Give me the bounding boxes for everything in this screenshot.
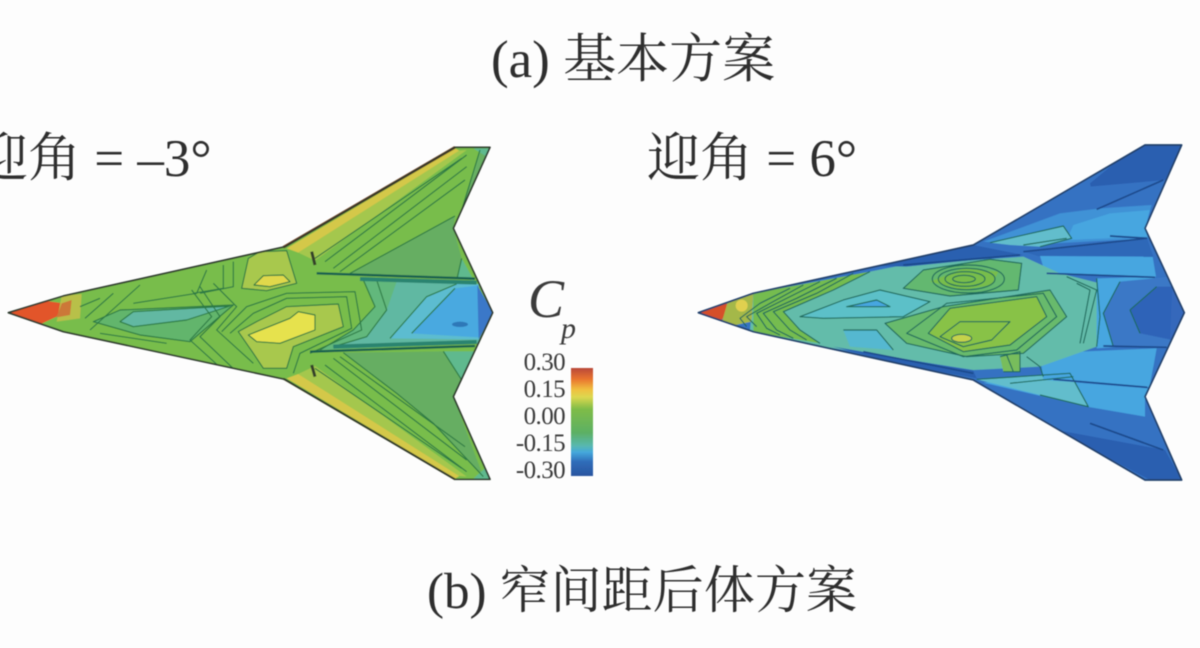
legend title: C [528,269,565,329]
scale labels: -0.30 [516,457,565,484]
scale labels: 0.15 [524,376,565,403]
scale labels: 0.30 [524,349,565,376]
chart: pressure contour, angle -3 [0,130,500,490]
title: (a) baseline scheme: (a) 基本方案 [491,31,775,89]
scale labels: -0.15 [516,430,565,457]
legend title [528,269,576,345]
scale labels [516,349,565,484]
colour bar [571,368,593,476]
title: (b) narrow-spacing aft-body scheme: (b) 窄间距后体方案 [427,563,857,620]
chart: pressure contour, angle 6 [690,130,1200,490]
legend title: p [559,312,576,345]
legend: Cp colour scale [516,269,593,484]
label: angle of attack 6: 迎角 = 6° [647,130,857,188]
scale labels: 0.00 [524,403,565,430]
